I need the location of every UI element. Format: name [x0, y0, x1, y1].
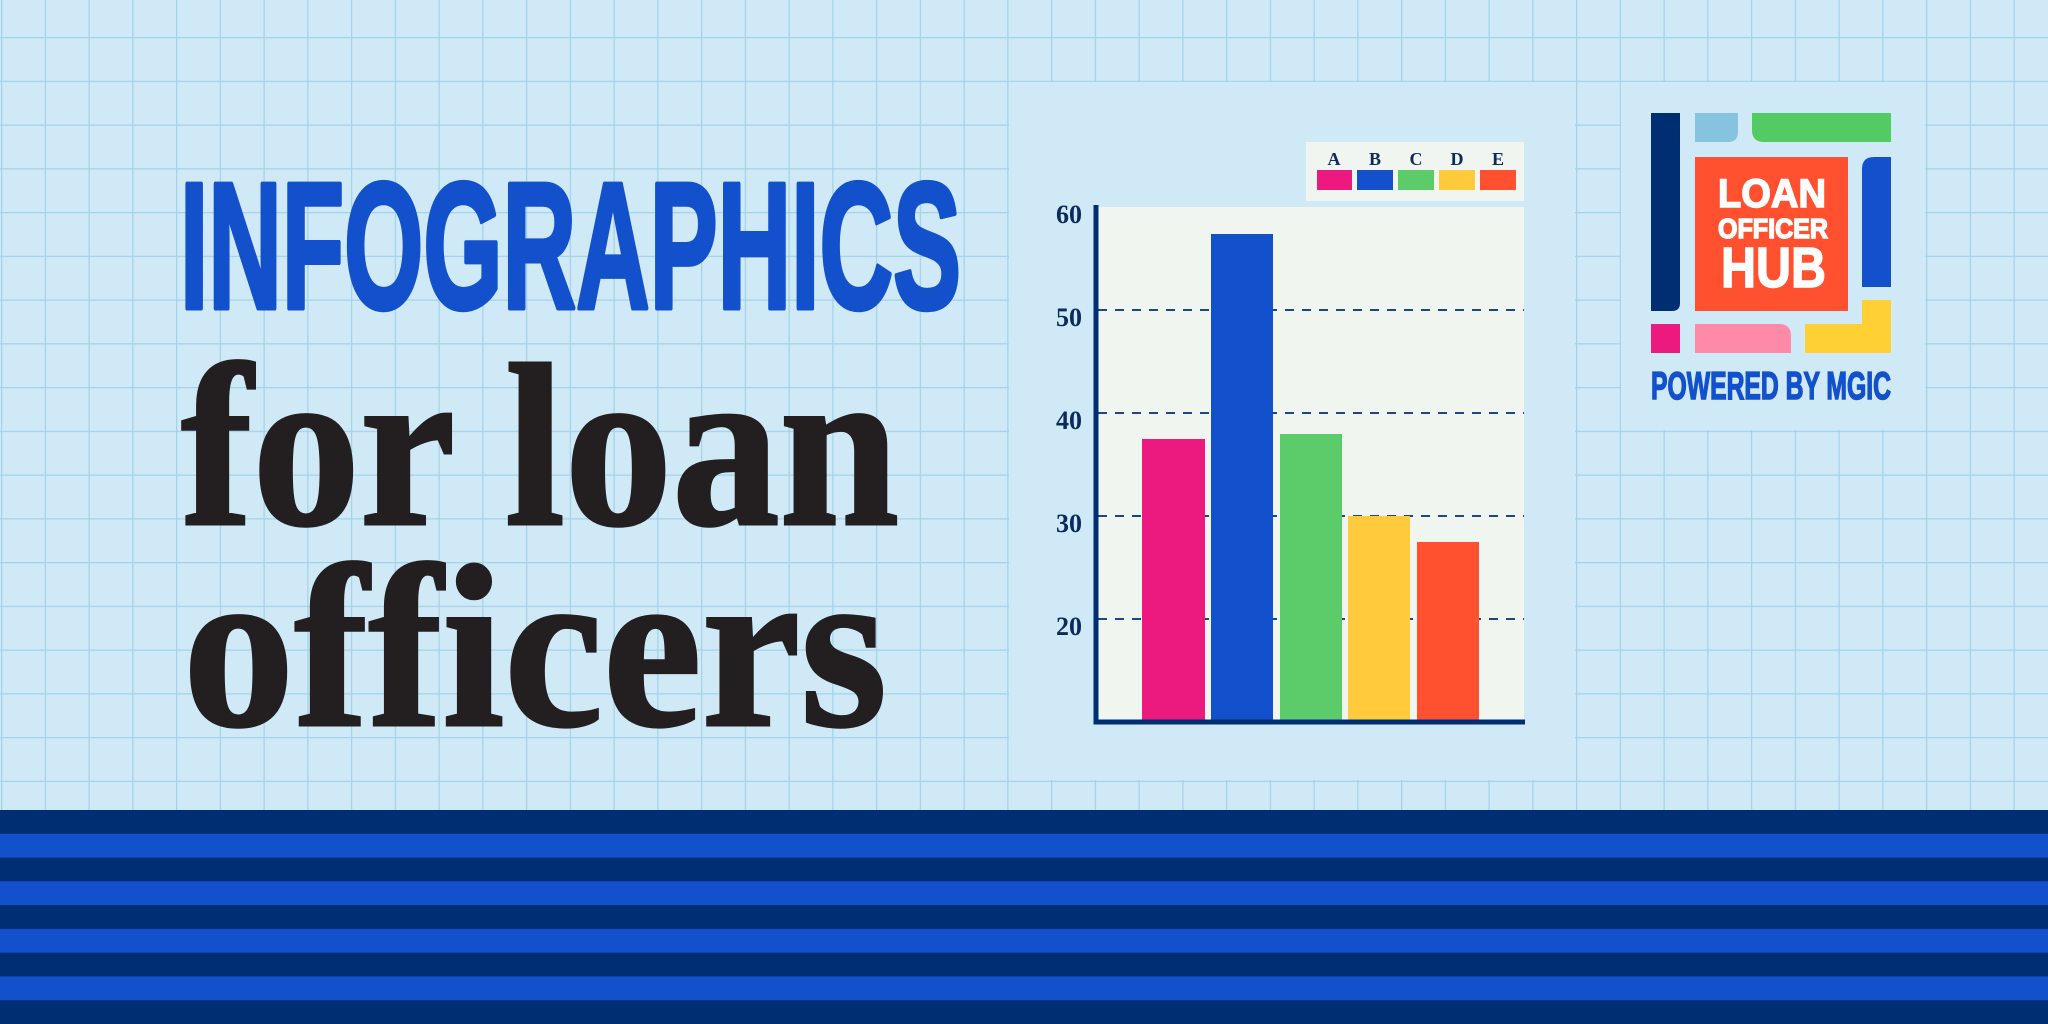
logo: Loan Officer Hub: OFFICER — [1718, 213, 1828, 244]
axes — [1096, 205, 1525, 722]
title: INFOGRAPHICS: INFOGRAPHICS — [180, 146, 961, 347]
logo: Loan Officer Hub: LOAN — [1718, 172, 1826, 216]
y-axis labels: 20 — [1056, 612, 1082, 641]
y-axis labels — [1056, 200, 1082, 641]
logo: Loan Officer Hub — [1651, 113, 1891, 408]
legend: E — [1492, 149, 1504, 169]
y-axis labels: 30 — [1056, 509, 1082, 538]
legend: A — [1328, 149, 1340, 169]
legend — [1306, 142, 1524, 201]
panel: logo backdrop — [1621, 82, 1925, 430]
bar chart — [1056, 142, 1525, 722]
footer stripes — [0, 810, 2048, 1024]
bars — [1142, 234, 1479, 720]
legend: C — [1410, 149, 1422, 169]
logo: Loan Officer Hub: HUB — [1721, 236, 1826, 300]
y-axis labels: 40 — [1056, 406, 1082, 435]
subtitle line 1: for loan: for loan — [181, 318, 899, 575]
logo tagline: POWERED BY MGIC — [1651, 365, 1891, 408]
legend: D — [1450, 149, 1464, 169]
legend: B — [1369, 149, 1381, 169]
y-axis labels: 50 — [1056, 303, 1082, 332]
y-axis labels: 60 — [1056, 200, 1082, 229]
subtitle line 2: officers: officers — [183, 519, 887, 776]
panel: chart backdrop — [1009, 82, 1575, 780]
